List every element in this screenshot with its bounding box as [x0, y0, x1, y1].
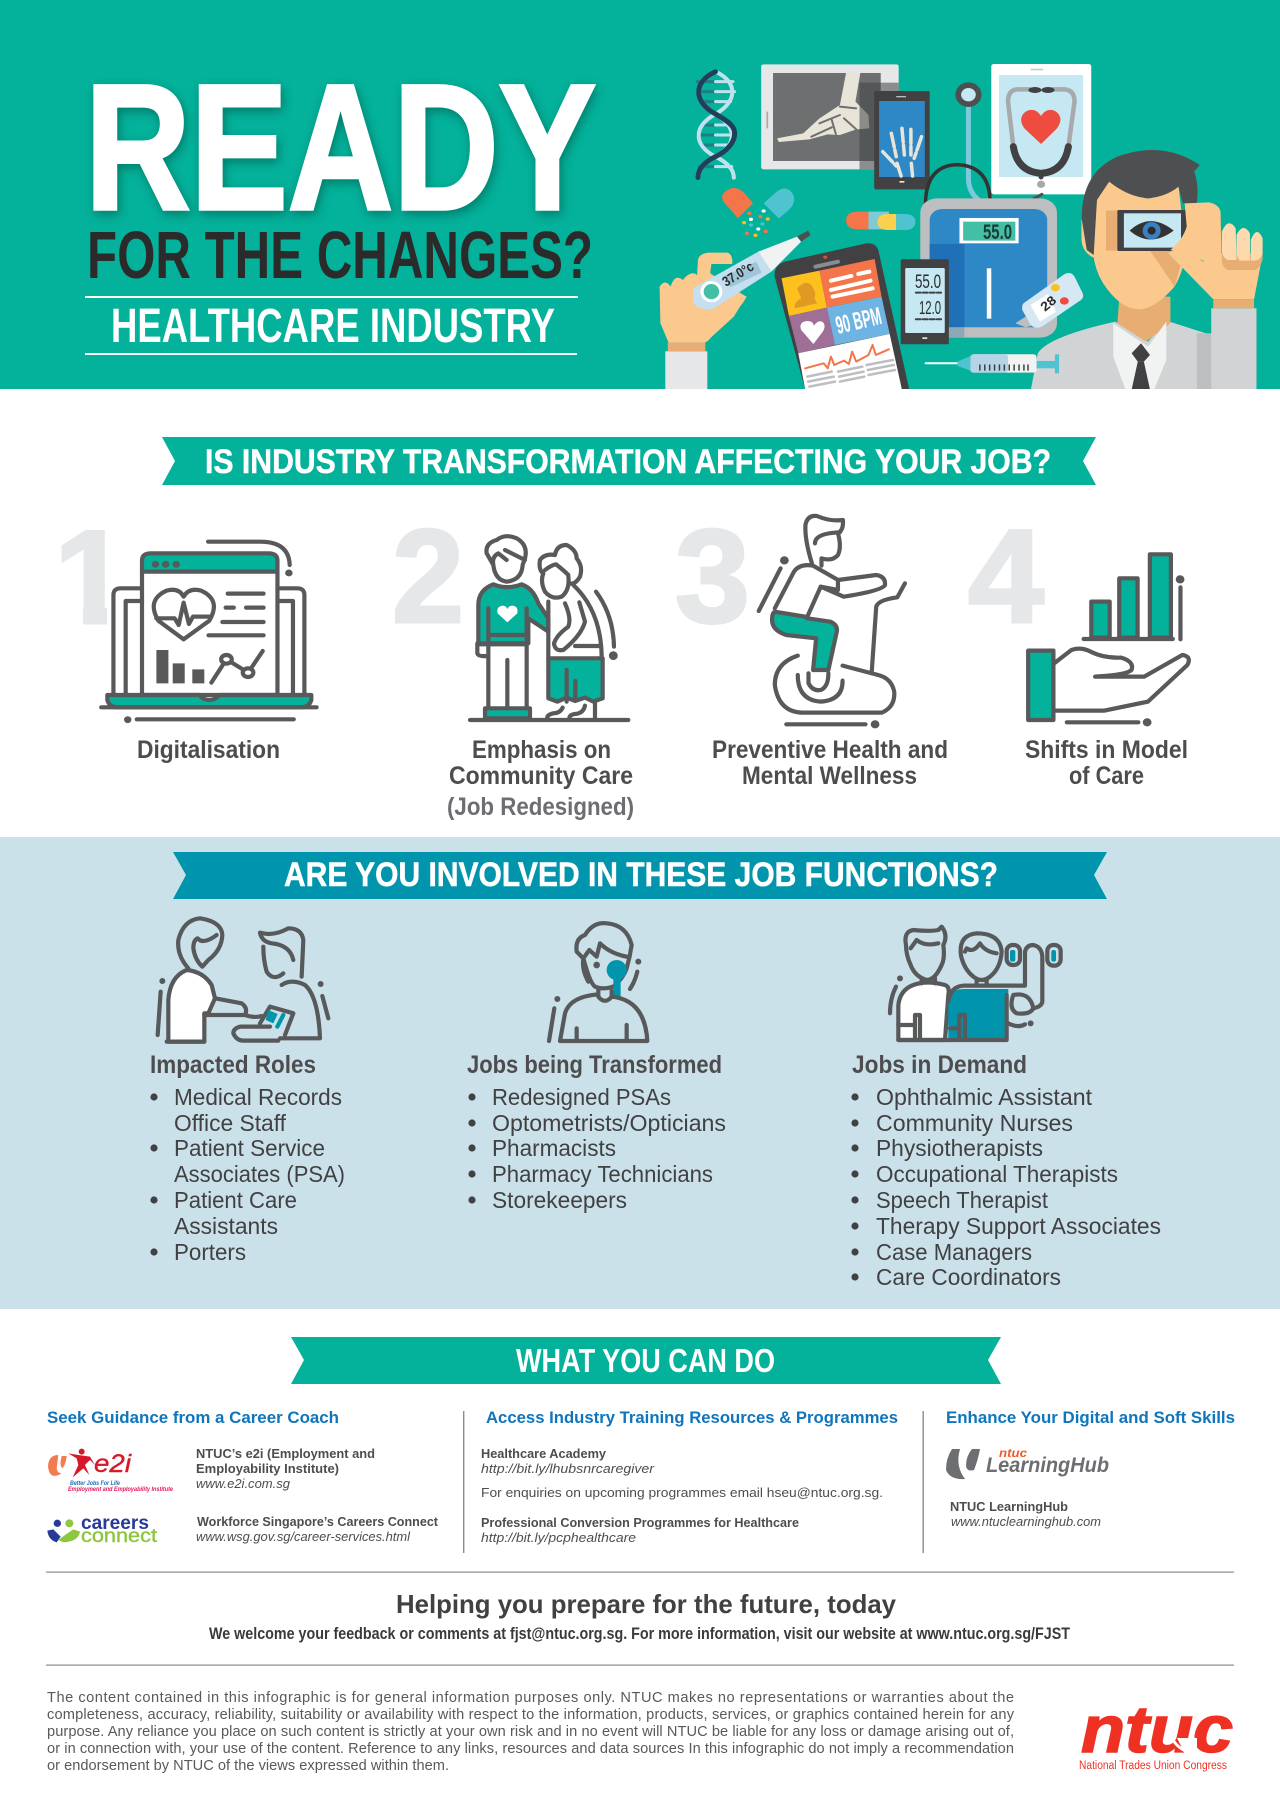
text: careers connect details: www.wsg.gov.sg/career-services.html: [196, 1529, 411, 1544]
icon: carer with elderly woman: [470, 536, 628, 720]
text: e2i details: www.e2i.com.sg: [196, 1476, 291, 1491]
text: learninghub details: [950, 1499, 1101, 1529]
heading: digital and soft skills: Enhance Your Digital and Soft Skills: [946, 1408, 1235, 1427]
heading: jobs in demand: Jobs in Demand: [852, 1051, 1027, 1079]
icon: health app smartphone: [775, 243, 909, 390]
text: professional conversion programmes: [481, 1515, 799, 1545]
list: jobs being transformed: [468, 1084, 726, 1213]
logo: ntuc: National Trades Union Congress: [1079, 1760, 1227, 1772]
label: emphasis on community care: (Job Redesigned): [447, 793, 634, 821]
illustration: medical technology collage: [660, 64, 1263, 390]
logo: ntuc learninghub: LearningHub: [986, 1454, 1109, 1477]
text: professional conversion programmes: http://bit.ly/pcphealthcare: [481, 1530, 636, 1545]
device readouts: [719, 221, 1059, 340]
panel: trend 1 digitalisation: [62, 530, 319, 763]
icon: pill capsule: [722, 188, 794, 237]
device readouts: 28: [1037, 293, 1059, 314]
logo: e2i: Employment and Employability Institute: [68, 1487, 174, 1493]
icon: dna helix: [697, 72, 735, 178]
heading: career coach: Seek Guidance from a Career Coach: [47, 1408, 339, 1427]
text: healthcare academy: [481, 1446, 883, 1500]
sector label: healthcare industry: HEALTHCARE INDUSTRY: [111, 300, 555, 353]
list: jobs being transformed: Optometrists/Opticians: [492, 1110, 726, 1136]
icon: horizontal capsules: [846, 212, 915, 230]
list: jobs in demand: Occupational Therapists: [876, 1161, 1118, 1187]
icon: nurse checking patient blood pressure: [158, 918, 328, 1042]
label: shifts in model of care: of Care: [1069, 762, 1144, 790]
logo: e2i: [48, 1449, 174, 1493]
icon: patient with throat highlighted: [549, 923, 647, 1041]
list: jobs in demand: Care Coordinators: [876, 1264, 1061, 1290]
list: impacted roles: Patient Service: [174, 1135, 325, 1161]
text: e2i details: Employability Institute): [196, 1461, 339, 1476]
logo: e2i: e2i: [94, 1450, 133, 1478]
heading: impacted roles: Impacted Roles: [150, 1051, 316, 1079]
text: disclaimer: purpose. Any reliance you place on such content is strictly at your own risk and in no event will NTUC be liable for any loss or damage arising out of,: [47, 1724, 1014, 1740]
text: healthcare academy: Healthcare Academy: [481, 1446, 607, 1461]
device readouts: 12.0: [919, 298, 941, 318]
label: emphasis on community care: Community Care: [449, 762, 633, 790]
text: disclaimer: [47, 1690, 1015, 1774]
icon: stethoscope tube: [955, 82, 1042, 200]
text: careers connect details: [196, 1514, 439, 1544]
list: jobs in demand: [851, 1084, 1161, 1290]
text: helping you prepare: We welcome your feedback or comments at fjst@ntuc.org.sg. For more information, visit our website at www.ntuc.org.sg/FJST: [209, 1624, 1071, 1643]
label: shifts in model of care: Shifts in Model: [1025, 736, 1188, 764]
logo: ntuc: ntuc: [1081, 1692, 1233, 1766]
icon: syringe: [926, 354, 1059, 373]
list: jobs being transformed: Redesigned PSAs: [492, 1084, 671, 1110]
icon: doctor holding phone to eye: [1031, 150, 1263, 390]
panel: trend 4 shifts in model of care: [968, 503, 1189, 790]
banner: are you involved in these job functions: ARE YOU INVOLVED IN THESE JOB FUNCTIONS?: [284, 856, 998, 894]
logo: careers connect: careers: [81, 1513, 149, 1534]
panel: access industry training resources: [481, 1408, 898, 1545]
text: learninghub details: www.ntuclearninghub.com: [951, 1514, 1101, 1529]
list: jobs in demand: Therapy Support Associates: [876, 1213, 1161, 1239]
logo: careers connect: connect: [81, 1526, 158, 1547]
panel: header: [0, 0, 1280, 389]
icon: hand holding bar chart: [1028, 554, 1189, 724]
text: helping you prepare: [209, 1589, 1071, 1643]
text: helping you prepare: Helping you prepare for the future, today: [396, 1589, 897, 1619]
panel: trend 3 preventive health: [675, 503, 948, 790]
device readouts: 55.0: [983, 221, 1012, 244]
subtitle: for the changes: FOR THE CHANGES?: [87, 218, 593, 293]
list: impacted roles: Office Staff: [174, 1110, 287, 1136]
device readouts: 37.0°c: [719, 258, 757, 290]
icon: physiotherapist with patient and weight: [890, 927, 1061, 1040]
panel: trend 2 community care: [392, 503, 634, 821]
text: disclaimer: The content contained in this infographic is for general information purposes only. NTUC makes no representations or warranties about the: [47, 1690, 1014, 1706]
icon: man on exercise bike: [759, 516, 905, 726]
icon: bp readout phone: [901, 259, 949, 344]
column: impacted roles: [150, 918, 345, 1265]
label: preventive health and mental wellness: [712, 736, 948, 790]
panel: job functions: [0, 837, 1280, 1309]
text: careers connect details: Workforce Singapore’s Careers Connect: [197, 1514, 439, 1529]
label: emphasis on community care: [447, 736, 634, 821]
text: healthcare academy: http://bit.ly/lhubsnrcaregiver: [481, 1461, 655, 1476]
list: jobs in demand: Physiotherapists: [876, 1135, 1043, 1161]
text: e2i details: [196, 1446, 375, 1491]
label: preventive health and mental wellness: Preventive Health and: [712, 736, 948, 764]
list: impacted roles: Associates (PSA): [174, 1161, 345, 1187]
icon: stethoscope tablet: [991, 64, 1091, 194]
list: jobs being transformed: Storekeepers: [492, 1187, 627, 1213]
banner: what you can do: [291, 1337, 1001, 1384]
icon: hand x-ray phone: [874, 91, 930, 189]
column: jobs in demand: [851, 927, 1161, 1290]
number 1: 1: [54, 504, 128, 652]
list: impacted roles: Assistants: [174, 1213, 278, 1239]
text: healthcare academy: For enquiries on upcoming programmes email hseu@ntuc.org.sg.: [481, 1485, 883, 1500]
number 4: 4: [968, 503, 1044, 651]
list: jobs being transformed: Pharmacy Technicians: [492, 1161, 713, 1187]
list: jobs in demand: Ophthalmic Assistant: [876, 1084, 1093, 1110]
list: jobs in demand: Community Nurses: [876, 1110, 1073, 1136]
label: preventive health and mental wellness: Mental Wellness: [742, 762, 917, 790]
label: shifts in model of care: [1025, 736, 1188, 790]
text: professional conversion programmes: Professional Conversion Programmes for Healthcare: [481, 1515, 799, 1530]
logo: e2i: Better Jobs For Life: [70, 1481, 121, 1487]
list: impacted roles: Medical Records: [174, 1084, 342, 1110]
number 2: 2: [392, 503, 464, 651]
logo: ntuc learninghub: [946, 1446, 1109, 1479]
icon: blood pressure machine: [920, 165, 1057, 338]
label: digitalisation: Digitalisation: [137, 736, 280, 764]
banner: what you can do: WHAT YOU CAN DO: [516, 1342, 775, 1379]
text: learninghub details: NTUC LearningHub: [950, 1499, 1068, 1514]
logo: ntuc learninghub: ntuc: [999, 1446, 1027, 1460]
logo: careers connect: [47, 1513, 158, 1547]
heading: training resources: Access Industry Training Resources & Programmes: [486, 1408, 898, 1427]
column: jobs being transformed: [467, 923, 726, 1213]
device readouts: 90 BPM: [833, 302, 884, 340]
list: jobs being transformed: Pharmacists: [492, 1135, 616, 1161]
title: READY: READY: [85, 47, 596, 247]
list: jobs in demand: Speech Therapist: [876, 1187, 1049, 1213]
list: impacted roles: Patient Care: [174, 1187, 297, 1213]
heading: jobs being transformed: Jobs being Transformed: [467, 1051, 722, 1079]
icon: glucose meter: [1015, 273, 1083, 328]
text: e2i details: NTUC’s e2i (Employment and: [196, 1446, 375, 1461]
banner: is industry transformation affecting your job: IS INDUSTRY TRANSFORMATION AFFECTING YOUR JOB?: [205, 443, 1051, 481]
panel: digital and soft skills: [946, 1408, 1235, 1529]
icon: laptop with health dashboard: [101, 542, 317, 721]
text: disclaimer: or in connection with, your use of the content. Reference to any links, resources and data sources In this infographic do not imply a recommendation: [47, 1741, 1014, 1757]
label: emphasis on community care: Emphasis on: [472, 736, 611, 764]
list: impacted roles: [150, 1084, 345, 1265]
list: jobs in demand: Case Managers: [876, 1239, 1032, 1265]
device readouts: 55.0: [915, 272, 941, 293]
text: disclaimer: or endorsement by NTUC of the views expressed within them.: [47, 1758, 449, 1774]
text: disclaimer: completeness, accuracy, reliability, suitability or availability with respect to the information, products, services, or graphics contained herein for any: [47, 1707, 1015, 1723]
icon: foot x-ray tablet: [761, 64, 899, 169]
icon: hand with thermometer: [660, 231, 811, 390]
list: impacted roles: Porters: [174, 1239, 246, 1265]
number 3: 3: [675, 503, 750, 651]
panel: seek guidance from a career coach: [47, 1408, 439, 1547]
